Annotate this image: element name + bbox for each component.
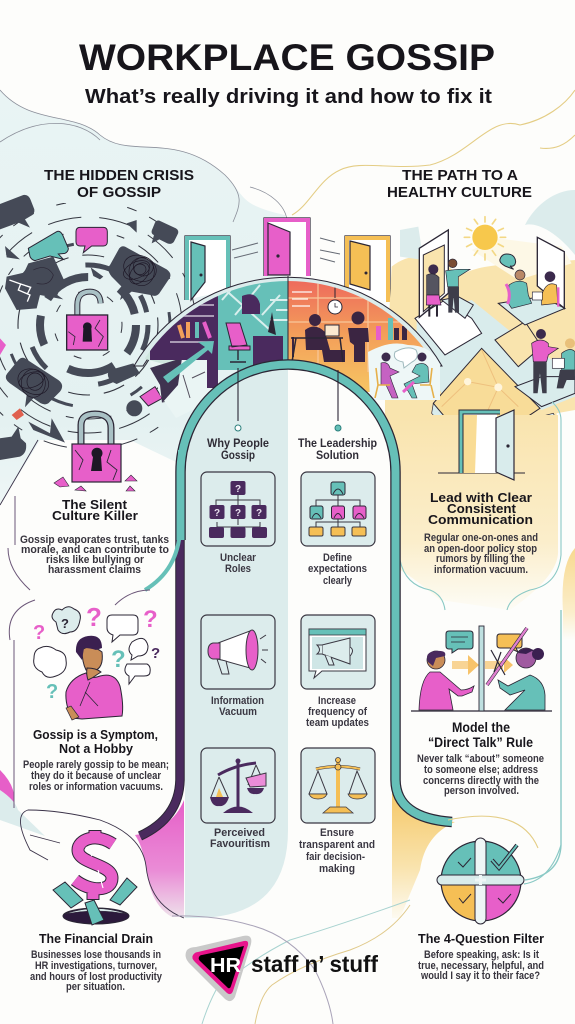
heading: healthy culture: THE PATH TO A [402,167,518,184]
text block: direct talk: Never talk “about” someone [417,753,544,765]
heading: healthy culture: HEALTHY CULTURE [387,184,532,201]
text block: silent culture killer: Gossip evaporates trust, tanks [20,534,169,546]
title: WORKPLACE GOSSIP [79,37,495,78]
text block: silent culture killer: harassment claims [48,564,141,576]
column: leadership solution labels and icons: The Leadership [298,436,377,450]
icon: direct talk [411,626,552,711]
text block: symptom: Not a Hobby [59,741,134,756]
panel: path to a healthy culture [385,217,575,460]
bubble: scribbled lower [6,358,62,407]
icon: thinking man with question marks [33,602,160,720]
heading: hidden crisis: THE HIDDEN CRISIS [44,167,194,184]
icon: silent culture killer padlock [54,414,137,491]
door frame left, with conversation [419,230,448,317]
text block: silent culture killer: Culture Killer [52,509,138,523]
yellow gradient side [392,790,455,918]
column: why people gossip labels and icons: Gossip [221,448,255,462]
door: yellow [345,236,390,302]
text block: direct talk: person involved. [444,785,519,797]
column: why people gossip labels and icons: Vacuum [219,706,257,718]
text block: symptom: Gossip is a Symptom, [33,727,158,742]
icon: clear org chart [301,472,375,546]
panel: right card [400,402,561,880]
column: leadership solution labels and icons: Solution [316,448,359,462]
bubble: scribbled large [108,246,170,300]
column: leadership solution labels and icons: making [319,863,355,875]
logo [186,936,378,1001]
icon: unclear roles org chart: ? [235,508,241,519]
text block: symptom: People rarely gossip to be mean; [23,759,169,771]
column: why people gossip labels and icons: Perceived [214,827,265,839]
column: why people gossip labels and icons: Favouritism [210,838,270,850]
scene: seated conversation [368,344,440,400]
column: leadership solution labels and icons: fair decision- [306,851,365,863]
panel: why people gossip (left column) [185,369,288,918]
icon: megaphone [201,615,275,689]
heading: healthy culture [387,167,532,201]
silhouettes at desk [292,312,369,362]
text block: lead with clear communication: Lead with Clear [430,490,532,505]
text block: financial drain: per situation. [66,981,125,993]
heading: hidden crisis [44,167,194,201]
text block: lead with clear communication: information vacuum. [434,564,528,576]
column: why people gossip labels and icons [201,436,275,850]
icon: thinking man with question marks: ? [111,646,126,673]
icon: thinking man with question marks: ? [151,645,160,662]
people: standing man and seated woman [532,329,575,393]
icon: thinking man with question marks: ? [33,622,45,644]
arch band [0,364,452,918]
bubble: small dark [152,221,178,244]
column: leadership solution labels and icons: team updates [306,717,369,729]
doors [185,218,390,302]
hills [385,256,575,460]
icon: thinking man with question marks: ? [143,606,158,633]
column: leadership solution labels and icons: Increase [318,695,356,707]
text block: direct talk: Model the [452,720,510,735]
bubble: speech teal [500,254,516,269]
text block: lead with clear communication: Communication [428,512,533,527]
text block: direct talk [417,720,544,797]
panel: leadership solution (right column) [288,369,392,918]
icon: unclear roles org chart [201,472,275,546]
figure: torso [66,673,123,719]
column: leadership solution labels and icons: frequency of [308,706,367,718]
icon: money drain [53,830,137,925]
text block: four question filter: true, necessary, helpful, and [418,960,544,972]
text block: symptom [23,727,169,793]
column: leadership solution labels and icons: Define [323,552,352,564]
icon: unclear roles org chart: ? [214,508,220,519]
text block: symptom: roles or information vacuums. [29,781,163,793]
pink gradient side [135,800,184,917]
subtitle: What’s really driving it and how to fix it [85,86,492,108]
dome band [134,277,442,366]
text block: lead with clear communication: an open-door policy stop [424,543,537,555]
door: pink [264,218,310,276]
text block: lead with clear communication: Regular one-on-ones and [424,532,538,544]
bubble: broken [5,257,64,310]
icon: unclear roles org chart: ? [256,508,262,519]
text block: financial drain: and hours of lost productivity [30,971,163,983]
icon: uneven scales [201,748,275,823]
text block: symptom: they do it because of unclear [31,770,162,782]
icon: team update window [301,615,375,689]
swirl rings [0,201,212,449]
icon: four question filter [437,816,561,924]
text block: financial drain: HR investigations, turnover, [35,960,157,972]
heading: hidden crisis: OF GOSSIP [77,184,161,201]
text block: four question filter: would I say it to their face? [420,970,540,982]
paths [415,297,575,447]
logo: staff n’ stuff [251,951,378,977]
text block: four question filter: The 4-Question Filter [418,931,544,946]
text block: lead with clear communication [424,490,538,576]
door: open doorway [438,410,525,480]
column: why people gossip labels and icons: Roles [225,563,251,575]
column: leadership solution labels and icons: expectations [308,563,367,575]
decorative curves [172,900,410,1024]
text block: financial drain: Businesses lose thousands in [31,949,161,961]
column: leadership solution labels and icons: transparent and [299,839,375,851]
text block: four question filter [418,931,544,982]
icon: balanced scales [301,748,375,823]
people: laptop pair [506,270,558,308]
panel: central dome scene [134,276,442,418]
text block: direct talk: concerns directly with the [423,775,539,787]
title [79,37,495,108]
column: why people gossip labels and icons: Unclear [220,552,257,564]
door frame right [537,237,564,308]
icon: broken padlock [67,292,108,350]
text block: direct talk: to someone else; address [424,764,538,776]
column: leadership solution labels and icons [298,436,377,875]
column: leadership solution labels and icons: Ensure [320,827,354,839]
text block: silent culture killer: risks like bullying or [46,554,145,566]
panel: hidden crisis whirlwind [0,195,212,460]
column: why people gossip labels and icons: Why People [207,436,269,450]
column: leadership solution labels and icons: clearly [323,575,353,587]
icon: unclear roles org chart: ? [235,484,241,495]
logo: HR [210,955,242,977]
text block: lead with clear communication: Consistent [447,501,517,516]
icon: thinking man with question marks: ? [46,681,58,703]
text block: four question filter: Before speaking, ask: Is it [424,949,539,961]
text block: silent culture killer [20,498,169,576]
door: teal [185,236,230,300]
bubble: dark top left [0,195,34,229]
text block: financial drain [30,931,163,993]
scene: left office [138,280,288,418]
icon: thinking man with question marks: ? [61,616,69,631]
text block: direct talk: “Direct Talk” Rule [428,735,533,750]
scene: right office [288,281,424,392]
text block: silent culture killer: morale, and can contribute to [21,544,169,556]
icon: thinking man with question marks: ? [86,602,102,632]
sun [464,217,506,260]
column: why people gossip labels and icons: Information [211,695,264,707]
dark fragments [28,363,140,443]
text block: silent culture killer: The Silent [62,498,128,512]
text block: financial drain: The Financial Drain [39,931,153,946]
bubble: pink [76,227,107,253]
text block: lead with clear communication: rumors by filling the [436,553,525,565]
people: two colleagues [426,259,470,317]
bubble: teal [28,231,68,261]
small shapes [5,220,137,279]
